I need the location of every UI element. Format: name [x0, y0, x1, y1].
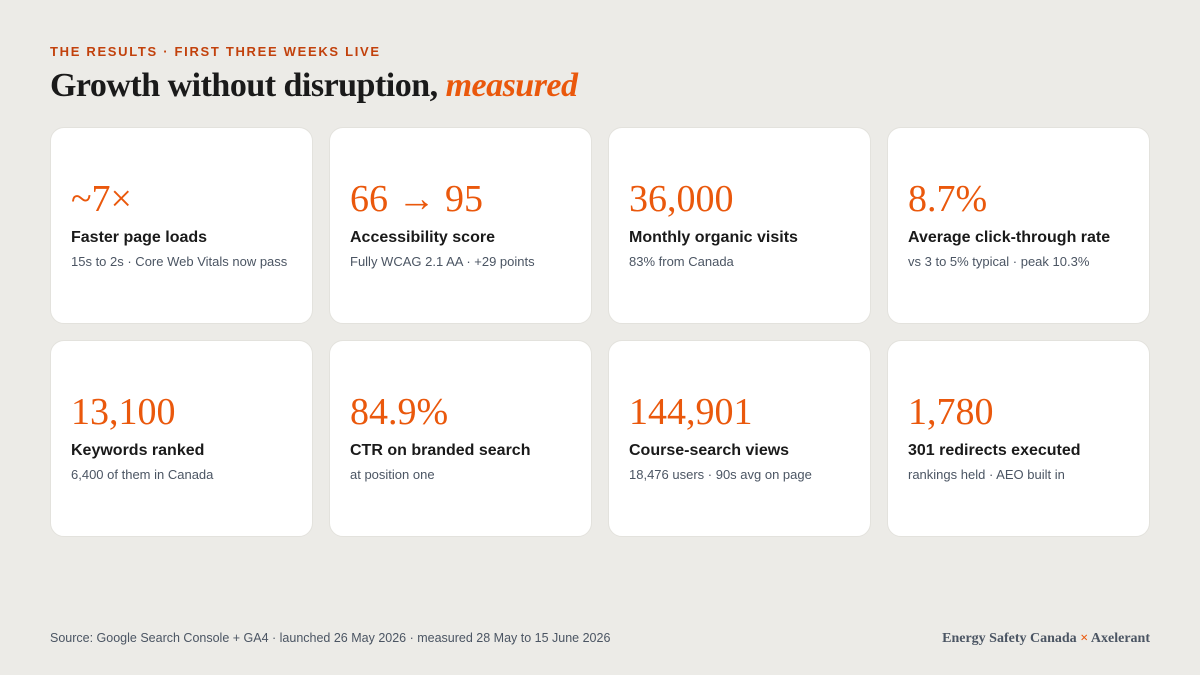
stat value: 1,780 — [908, 391, 994, 433]
stat detail: 18,476 users · 90s avg on page — [629, 467, 812, 482]
stat detail: 83% from Canada — [629, 254, 734, 269]
source note: Source: Google Search Console + GA4 · launched 26 May 2026 · measured 28 May to 15 June 2026 — [50, 631, 610, 645]
stat value: 144,901 — [629, 391, 752, 433]
stat label: Keywords ranked — [71, 442, 204, 459]
stat label: 301 redirects executed — [908, 442, 1081, 459]
title: Growth without disruption, measured — [50, 67, 578, 104]
brand credit: Energy Safety Canada × Axelerant — [942, 631, 1150, 646]
stat detail: vs 3 to 5% typical · peak 10.3% — [908, 254, 1089, 269]
panel: average click-through rate — [887, 127, 1150, 324]
panel: accessibility score — [329, 127, 592, 324]
panel: monthly organic visits — [608, 127, 871, 324]
stat label: Average click-through rate — [908, 229, 1110, 246]
panel: CTR on branded search — [329, 340, 592, 537]
stat label: CTR on branded search — [350, 442, 530, 459]
stat detail: Fully WCAG 2.1 AA · +29 points — [350, 254, 535, 269]
stat label: Course-search views — [629, 442, 789, 459]
stat value: ~7× — [71, 178, 132, 220]
stat value: 13,100 — [71, 391, 176, 433]
panel: faster page loads — [50, 127, 313, 324]
stat label: Faster page loads — [71, 229, 207, 246]
stat detail: 6,400 of them in Canada — [71, 467, 213, 482]
stat label: Monthly organic visits — [629, 229, 798, 246]
eyebrow: THE RESULTS · FIRST THREE WEEKS LIVE — [50, 44, 381, 59]
stat detail: 15s to 2s · Core Web Vitals now pass — [71, 254, 287, 269]
panel: course-search views — [608, 340, 871, 537]
stat value: 36,000 — [629, 178, 734, 220]
stat detail: rankings held · AEO built in — [908, 467, 1065, 482]
stat value: 8.7% — [908, 178, 987, 220]
panel: keywords ranked — [50, 340, 313, 537]
stat value: 84.9% — [350, 391, 448, 433]
stat value: 66 → 95 — [350, 178, 483, 220]
panel: 301 redirects executed — [887, 340, 1150, 537]
stat label: Accessibility score — [350, 229, 495, 246]
stat detail: at position one — [350, 467, 435, 482]
